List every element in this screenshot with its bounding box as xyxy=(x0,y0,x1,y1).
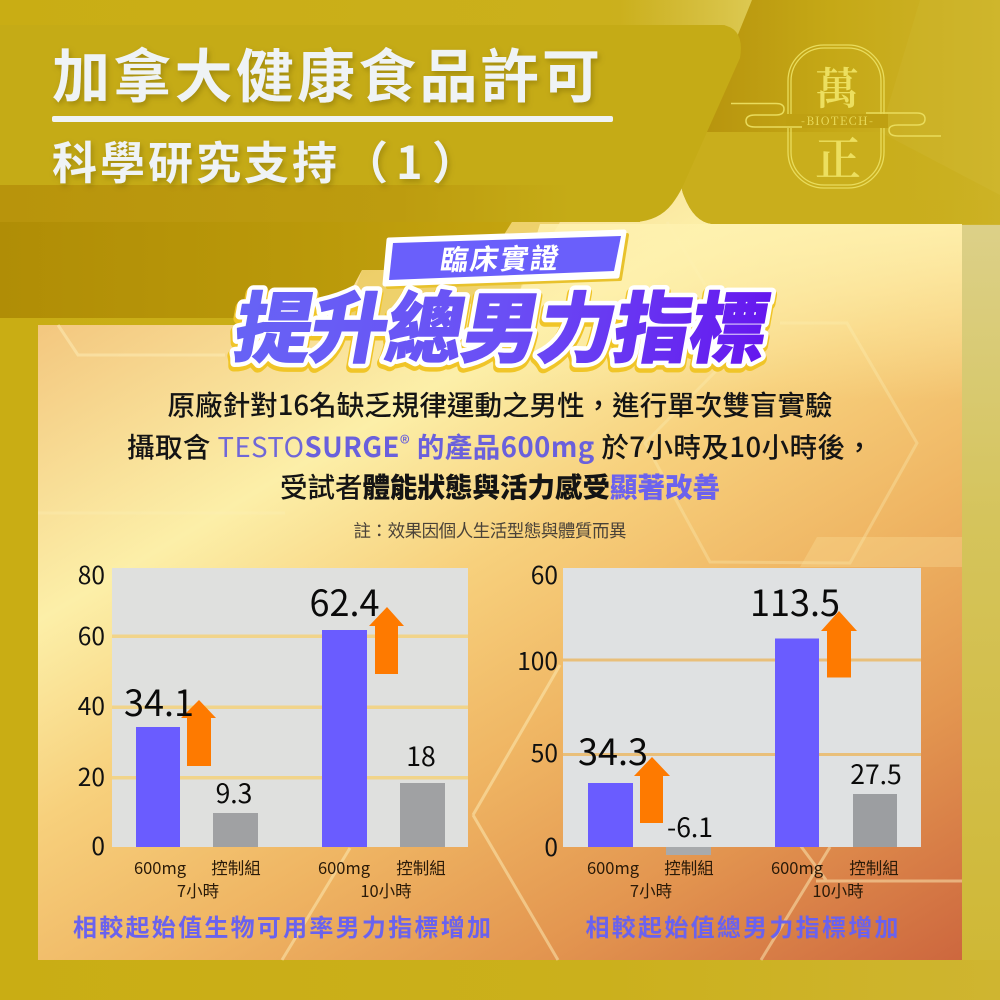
panel: right top logo panel xyxy=(681,0,1000,224)
y axis: 0 xyxy=(544,829,558,864)
value labels: 34.3 xyxy=(578,724,648,776)
category labels: 7小時 xyxy=(630,878,672,902)
value labels xyxy=(124,575,436,811)
description text: ® xyxy=(400,428,410,457)
title underline xyxy=(52,116,613,122)
headline: 提升總男力指標 xyxy=(227,268,779,379)
category labels: 控制組 xyxy=(664,855,714,879)
y axis: 50 xyxy=(531,735,558,770)
subtitle: 1 xyxy=(396,127,423,192)
headline: 提升總男力指標 xyxy=(227,268,779,379)
y axis: 60 xyxy=(531,557,558,592)
y axis: 40 xyxy=(78,688,105,723)
y axis: 80 xyxy=(78,557,105,592)
panel: title panel xyxy=(0,25,741,222)
y axis: 0 xyxy=(91,828,105,863)
description text: 於7小時及10小時後， xyxy=(601,425,873,465)
badge: clinical proof xyxy=(385,232,627,287)
value labels: 9.3 xyxy=(216,772,252,811)
bars xyxy=(588,638,897,855)
logo: 萬 xyxy=(815,53,859,117)
y axis xyxy=(517,557,558,864)
panel: content background xyxy=(38,222,962,960)
chart: total indicator xyxy=(517,557,921,943)
category labels: 600mg xyxy=(771,855,824,879)
category labels: 600mg xyxy=(587,855,640,879)
y axis xyxy=(78,557,105,863)
bars xyxy=(136,630,445,847)
value labels: -6.1 xyxy=(667,806,713,845)
category labels xyxy=(587,855,899,902)
footnote: 註：效果因個人生活型態與體質而異 xyxy=(354,518,626,543)
value labels: 18 xyxy=(406,735,436,774)
description text: 攝取含 TESTOSURGE xyxy=(127,425,399,465)
plot area xyxy=(563,568,921,847)
chart: bioavailable indicator xyxy=(73,557,491,943)
chart caption: 相較起始值總男力指標增加 xyxy=(586,908,898,943)
headline: 提升總男力指標 xyxy=(226,271,778,382)
description text: 受試者體能狀態與活力感受顯著改善 xyxy=(280,465,720,505)
chart caption: 相較起始值生物可用率男力指標增加 xyxy=(73,908,491,943)
category labels: 600mg xyxy=(134,855,187,879)
category labels: 7小時 xyxy=(177,878,219,902)
arrow: up 7h xyxy=(181,700,216,766)
title: 加拿大健康食品許可 xyxy=(52,30,600,114)
y axis: 100 xyxy=(517,643,558,678)
category labels: 600mg xyxy=(318,855,371,879)
value labels: 27.5 xyxy=(850,753,902,792)
category labels xyxy=(134,855,446,902)
y axis: 60 xyxy=(78,618,105,653)
value labels: 62.4 xyxy=(310,575,379,627)
y axis: 20 xyxy=(78,759,105,794)
subtitle: （ xyxy=(343,127,388,192)
arrow: up 10h xyxy=(369,607,404,674)
category labels: 10小時 xyxy=(360,878,412,902)
value labels: 113.5 xyxy=(750,575,840,627)
subtitle: 科學研究支持 xyxy=(52,127,340,192)
value labels xyxy=(578,575,902,845)
badge: clinical proof: 臨床實證 xyxy=(438,236,562,279)
logo: -BIOTECH- xyxy=(801,113,873,129)
category labels: 10小時 xyxy=(812,878,864,902)
description text xyxy=(127,383,873,505)
arrow: up 10h xyxy=(821,611,857,678)
description text: 原廠針對16名缺乏規律運動之男性，進行單次雙盲實驗 xyxy=(168,383,832,423)
plot area xyxy=(112,568,468,847)
value labels: 34.1 xyxy=(124,675,194,727)
upper content fade xyxy=(400,224,962,400)
arrow: up 7h xyxy=(634,757,670,823)
logo xyxy=(731,45,941,189)
category labels: 控制組 xyxy=(396,855,446,879)
category labels: 控制組 xyxy=(211,855,261,879)
category labels: 控制組 xyxy=(849,855,899,879)
description text: 的產品600mg xyxy=(410,425,594,465)
subtitle: ） xyxy=(432,127,477,192)
logo: 正 xyxy=(815,123,861,189)
